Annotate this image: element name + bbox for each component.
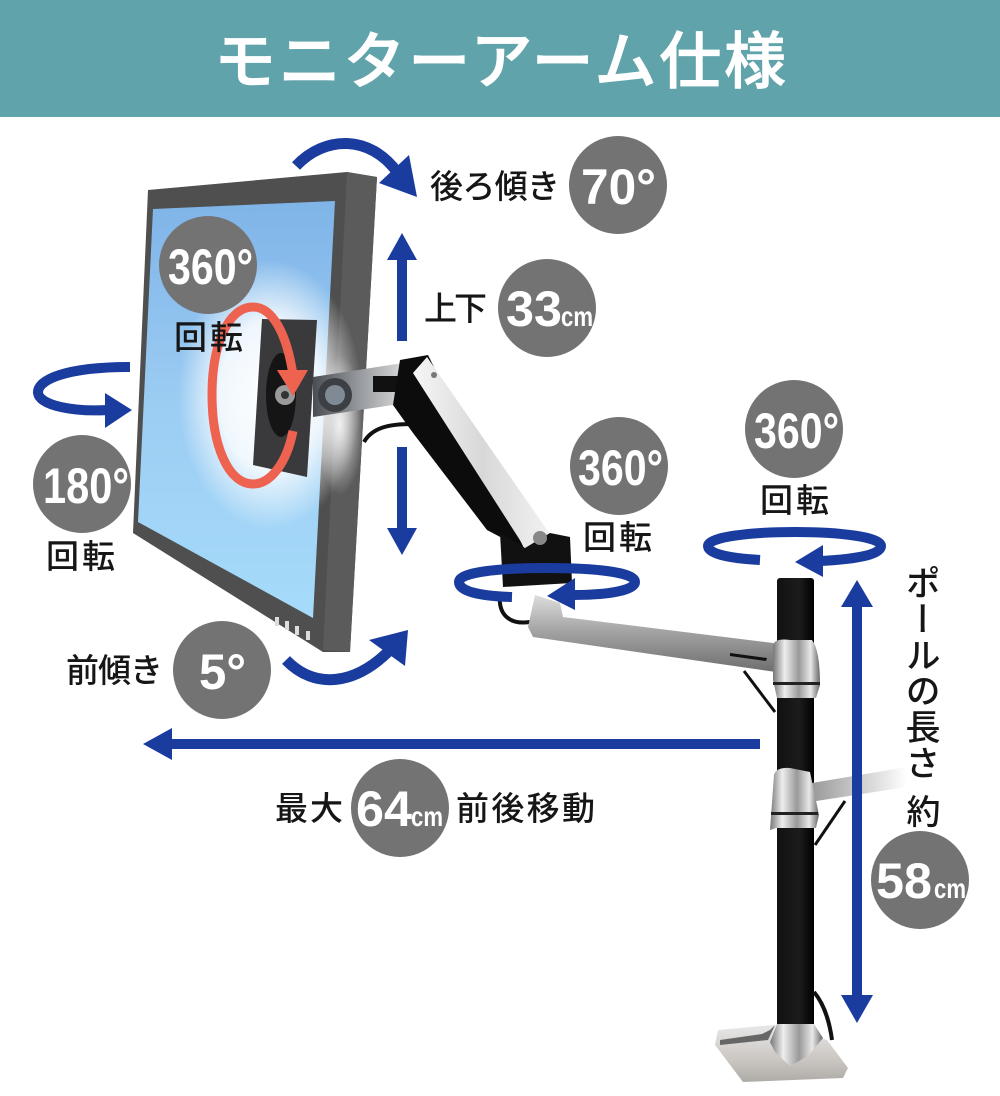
arrow: tilt forward xyxy=(286,630,408,680)
clamp base xyxy=(715,992,848,1082)
badge: height 33cm: cm xyxy=(561,301,593,332)
badge: pole length 58cm: cm xyxy=(934,873,966,904)
title banner: モニターアーム仕様 xyxy=(214,28,786,97)
monitor arm xyxy=(313,355,845,845)
arrow: tilt back xyxy=(296,143,417,197)
badge: reach 64cm: cm xyxy=(411,801,443,832)
monitor xyxy=(133,172,377,652)
arrow: swivel left xyxy=(38,367,132,428)
arrow: pole length xyxy=(841,580,873,1023)
VESA mount plate xyxy=(253,319,317,477)
title banner xyxy=(0,0,1000,117)
badge: tilt forward 5° xyxy=(173,621,271,719)
badge: screen rotation 360°: 360° xyxy=(168,239,253,295)
arrow: up xyxy=(387,233,417,341)
badge: tilt back 70° xyxy=(569,136,667,234)
arrow: down xyxy=(387,447,417,555)
icon: red rotation ring arrow xyxy=(212,307,308,484)
badge: pole rotation 360° xyxy=(745,380,843,478)
label: pole rotation: 回転 xyxy=(760,482,829,519)
label: joint rotation: 回転 xyxy=(583,519,652,556)
badge: pole length 58cm xyxy=(871,831,969,929)
badge: height 33cm: 33 xyxy=(506,281,562,337)
badge: height 33cm xyxy=(498,259,596,357)
label: swivel rotation: 回転 xyxy=(46,538,115,575)
label: pole length: ポールの長さ xyxy=(900,565,940,781)
label: screen rotation: 回転 xyxy=(174,319,243,356)
badge: tilt back 70°: 70° xyxy=(581,159,656,215)
arrow: pole rotation xyxy=(708,532,881,577)
label: up and down: 上下 xyxy=(424,290,487,327)
arrow: forward and back reach xyxy=(143,728,760,760)
arrow: arm joint rotation xyxy=(459,568,635,610)
pole xyxy=(770,578,907,1030)
label: approximately: 約 xyxy=(901,794,940,828)
badge: pole rotation 360°: 360° xyxy=(754,403,839,459)
badge: swivel 180° xyxy=(33,435,131,533)
label: maximum: 最大 xyxy=(275,790,343,827)
badge: tilt forward 5°: 5° xyxy=(199,644,246,700)
badge: joint rotation 360° xyxy=(570,417,668,515)
badge: pole length 58cm: 58 xyxy=(876,853,932,909)
badge: swivel 180°: 180° xyxy=(43,458,129,514)
label: tilt forward: 前傾き xyxy=(66,652,163,689)
label: tilt back: 後ろ傾き xyxy=(430,168,560,205)
badge: reach 64cm xyxy=(351,759,449,857)
badge: screen rotation 360° xyxy=(159,216,257,314)
badge: joint rotation 360°: 360° xyxy=(578,440,663,496)
badge: reach 64cm: 64 xyxy=(356,781,412,837)
label: forward and back movement: 前後移動 xyxy=(456,790,595,827)
